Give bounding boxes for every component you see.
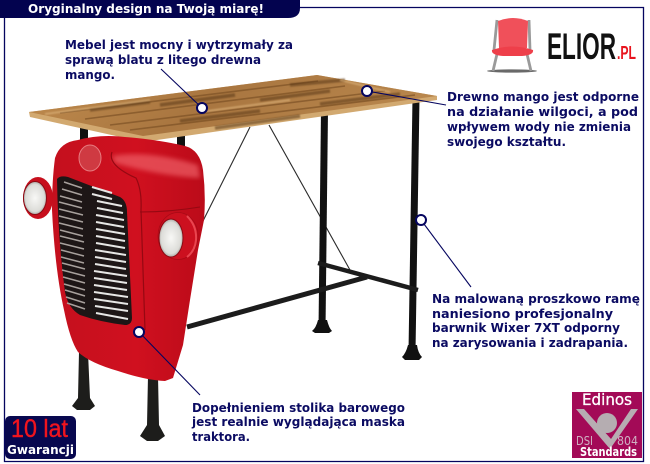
logo: Elior.pl <box>487 18 636 73</box>
table top <box>29 75 437 142</box>
callout: tractor mask: Dopełnieniem stolika barowego <box>192 401 405 415</box>
table base: legs and braces <box>80 98 422 360</box>
callout: powder coating: Na malowaną proszkowo ramę <box>432 292 640 306</box>
header banner: Oryginalny design na Twoją miarę! <box>28 2 264 16</box>
icon: right headlight <box>158 212 198 260</box>
icon: left headlight <box>23 177 53 219</box>
callout: table top strength: Mebel jest mocny i wytrzymały za <box>65 38 293 52</box>
callout: moisture resistance <box>362 86 639 149</box>
callout: tractor mask: traktora. <box>192 430 250 444</box>
callout: moisture resistance: na działanie wilgoci, a pod <box>447 105 638 119</box>
logo: Elior.pl: .PL <box>617 43 636 63</box>
badge: Edinos DSI 804 Standards: Edinos <box>582 390 632 409</box>
callout: table top strength: sprawą blatu z litego drewna <box>65 53 261 67</box>
tractor mask <box>23 136 205 381</box>
hood highlights <box>79 145 200 330</box>
badge: Edinos DSI 804 Standards: DSI <box>576 434 593 448</box>
icon: red chair <box>487 18 537 73</box>
badge: Edinos DSI 804 Standards <box>572 390 642 459</box>
header banner <box>0 0 300 18</box>
callout: table top strength: mango. <box>65 68 115 82</box>
callout: tractor mask: jest realnie wyglądająca maska <box>191 415 405 429</box>
radiator grille <box>57 176 132 325</box>
badge: 10 year warranty: Gwarancji <box>7 443 74 457</box>
callout: powder coating <box>416 215 640 350</box>
callout: moisture resistance: swojego kształtu. <box>447 135 566 149</box>
callout: powder coating: na zarysowania i zadrapania. <box>432 336 628 350</box>
tractor body <box>52 136 205 381</box>
callout: tractor mask <box>134 327 405 444</box>
tractor front legs <box>72 352 165 441</box>
callout: powder coating: barwnik Wixer 7XT odporny <box>432 321 620 335</box>
badge: 10 year warranty <box>5 415 76 459</box>
callout: moisture resistance: Drewno mango jest odporne <box>447 90 639 104</box>
callout: powder coating: naniesiono profesjonalny <box>432 307 613 321</box>
badge: 10 year warranty: 10 lat <box>11 415 68 443</box>
callout: table top strength <box>65 38 293 113</box>
badge: Edinos DSI 804 Standards: 804 <box>617 434 638 448</box>
callout: moisture resistance: wpływem wody nie zmienia <box>447 120 631 134</box>
badge: Edinos DSI 804 Standards: Standards <box>580 445 637 459</box>
